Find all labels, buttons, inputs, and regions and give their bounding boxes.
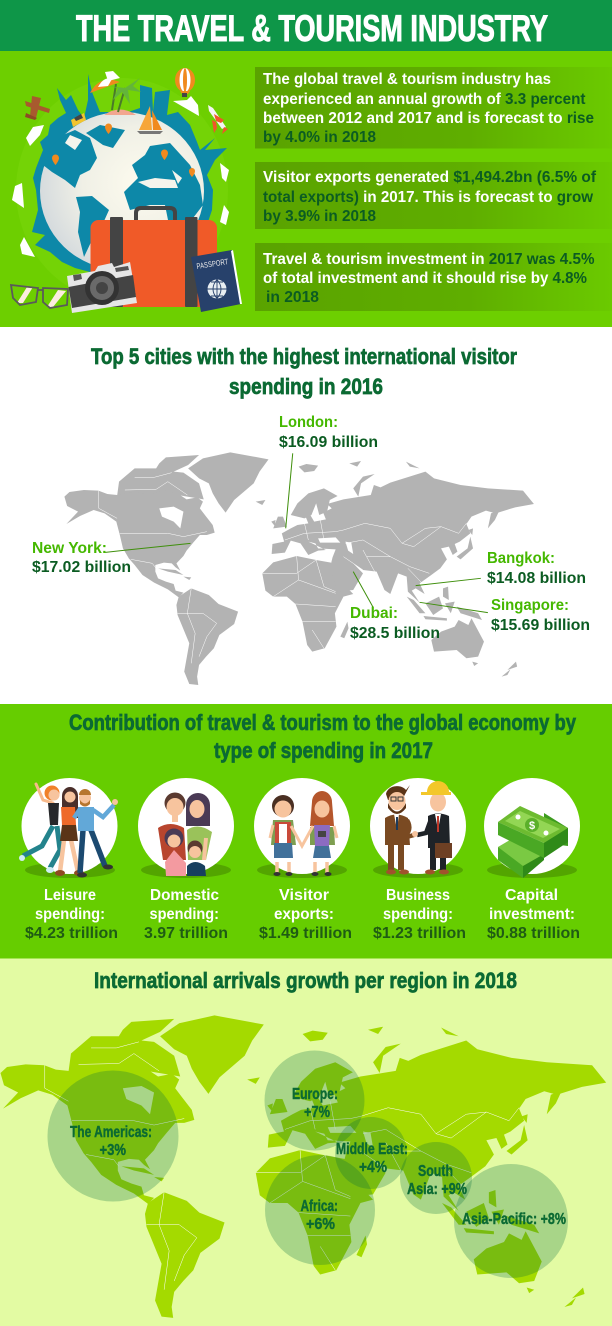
label: Dubai: Dubai: <box>350 605 398 622</box>
icon: stacks of banknotes: $ <box>529 820 535 832</box>
car <box>71 113 86 127</box>
skyline behind globe <box>32 74 227 272</box>
label: Asia-Pacific: Asia-Pacific: +8% <box>462 1211 566 1228</box>
label: 3.97 trillion <box>144 925 228 942</box>
label: Dubai: $28.5 billion <box>350 625 440 642</box>
map pins <box>52 124 195 177</box>
icon: stacks of banknotes <box>498 806 568 878</box>
label: spending: <box>150 906 219 923</box>
passport <box>191 250 242 312</box>
label: Bangkok <box>487 550 586 587</box>
icon: family <box>158 792 212 876</box>
label: New York: New York: <box>32 540 107 557</box>
label: Dubai <box>350 605 440 642</box>
label: spending: <box>35 906 105 923</box>
item: leisure spending <box>19 778 118 942</box>
panel: top 5 cities <box>0 327 612 704</box>
heading: International arrivals growth per region in 2018 <box>94 968 517 993</box>
label: Visitor <box>279 887 329 904</box>
heading <box>91 344 517 399</box>
label: Capital <box>505 887 558 904</box>
label: Europe: +7% <box>304 1104 330 1121</box>
sailboat <box>137 106 163 134</box>
item: domestic spending <box>138 778 234 942</box>
halo <box>16 78 228 302</box>
label: exports: <box>274 906 334 923</box>
label: Singapore <box>491 597 590 634</box>
label: Europe: Europe: <box>292 1086 338 1103</box>
region circles <box>48 1050 568 1278</box>
label: The Americas <box>70 1124 152 1159</box>
text block: growth: The global travel & tourism industry has <box>263 71 551 88</box>
text block: investment <box>255 243 612 311</box>
label: Middle East: Middle East: <box>336 1141 408 1158</box>
illustration: globe and travel items <box>11 68 242 313</box>
label: $1.23 trillion <box>373 925 466 942</box>
label: South Asia <box>407 1163 467 1198</box>
label: Domestic <box>150 887 219 904</box>
airplane <box>208 105 228 134</box>
label: London <box>279 414 378 451</box>
panel: intro <box>0 51 612 327</box>
text block: growth: by 4.0% in 2018 <box>263 129 376 146</box>
panel: international arrivals <box>0 958 612 1326</box>
label: New York: $17.02 billion <box>32 559 131 576</box>
label: Singapore: Singapore: <box>491 597 569 614</box>
label: Africa: +6% <box>306 1216 335 1233</box>
icon: businessmen shaking hands <box>385 781 452 874</box>
label: The Americas: The Americas: <box>70 1124 152 1141</box>
hot air balloon <box>175 68 195 97</box>
suitcase <box>90 208 217 307</box>
label: $4.23 trillion <box>25 925 118 942</box>
heading: type of spending in 2017 <box>214 738 433 763</box>
text block: growth: experienced an annual growth of 3.3 percent <box>263 91 586 108</box>
item: visitor exports <box>254 778 352 942</box>
text block: visitor exports <box>255 162 612 229</box>
label: London: London: <box>279 414 338 431</box>
label: $1.49 trillion <box>259 925 352 942</box>
icon: three friends <box>19 784 118 878</box>
label: Europe <box>292 1086 338 1121</box>
globe <box>40 112 204 270</box>
camera <box>67 262 137 313</box>
label: London: $16.09 billion <box>279 434 378 451</box>
text block: growth: between 2012 and 2017 and is forecast to rise <box>263 110 594 127</box>
label: Bangkok: $14.08 billion <box>487 570 586 587</box>
label: South Asia: South <box>418 1163 453 1180</box>
globe continents <box>43 125 203 257</box>
label: $0.88 trillion <box>487 925 580 942</box>
label: Bangkok: Bangkok: <box>487 550 555 567</box>
callout lines <box>105 453 488 613</box>
text block: investment: in 2018 <box>266 289 319 306</box>
label <box>259 887 352 942</box>
text block: visitor exports: by 3.9% in 2018 <box>263 208 376 225</box>
item: capital investment <box>484 778 580 942</box>
label: Africa: Africa: <box>300 1198 338 1215</box>
label <box>144 887 228 942</box>
label: Business <box>386 887 450 904</box>
header banner <box>0 0 612 51</box>
label: spending: <box>383 906 453 923</box>
heading <box>69 710 577 763</box>
label <box>487 887 580 942</box>
text block: growth <box>255 67 612 148</box>
biplane <box>25 96 50 120</box>
label: Africa <box>300 1198 338 1233</box>
label: South Asia: Asia: +9% <box>407 1181 467 1198</box>
world map: grey <box>64 452 534 685</box>
panel: contribution by spending type <box>0 704 612 958</box>
label: Middle East: +4% <box>359 1159 387 1176</box>
passport: PASSPORT <box>196 257 229 271</box>
clouds <box>12 96 229 257</box>
text block: visitor exports: total exports) in 2017. This is forecast to grow <box>263 189 594 206</box>
heading: spending in 2016 <box>229 374 383 399</box>
label: Leisure <box>44 887 96 904</box>
text block: investment: of total investment and it should rise by 4.8% <box>263 270 587 287</box>
icon: backpackers <box>270 791 337 876</box>
sunglasses <box>11 285 68 308</box>
text block: investment: Travel & tourism investment in 2017 was 4.5% <box>263 251 595 268</box>
label: New York <box>32 540 131 576</box>
label <box>373 887 466 942</box>
label: Singapore: $15.69 billion <box>491 617 590 634</box>
item: business spending <box>370 778 466 942</box>
label: Middle East <box>336 1141 408 1176</box>
island with palm trees and umbrella <box>90 71 141 115</box>
text block: visitor exports: Visitor exports generated $1,494.2bn (6.5% of <box>263 169 597 186</box>
label: investment: <box>489 906 575 923</box>
world map: green <box>0 1015 606 1318</box>
heading: Top 5 cities with the highest international visitor <box>91 344 517 369</box>
label: The Americas: +3% <box>100 1142 126 1159</box>
label <box>25 887 118 942</box>
